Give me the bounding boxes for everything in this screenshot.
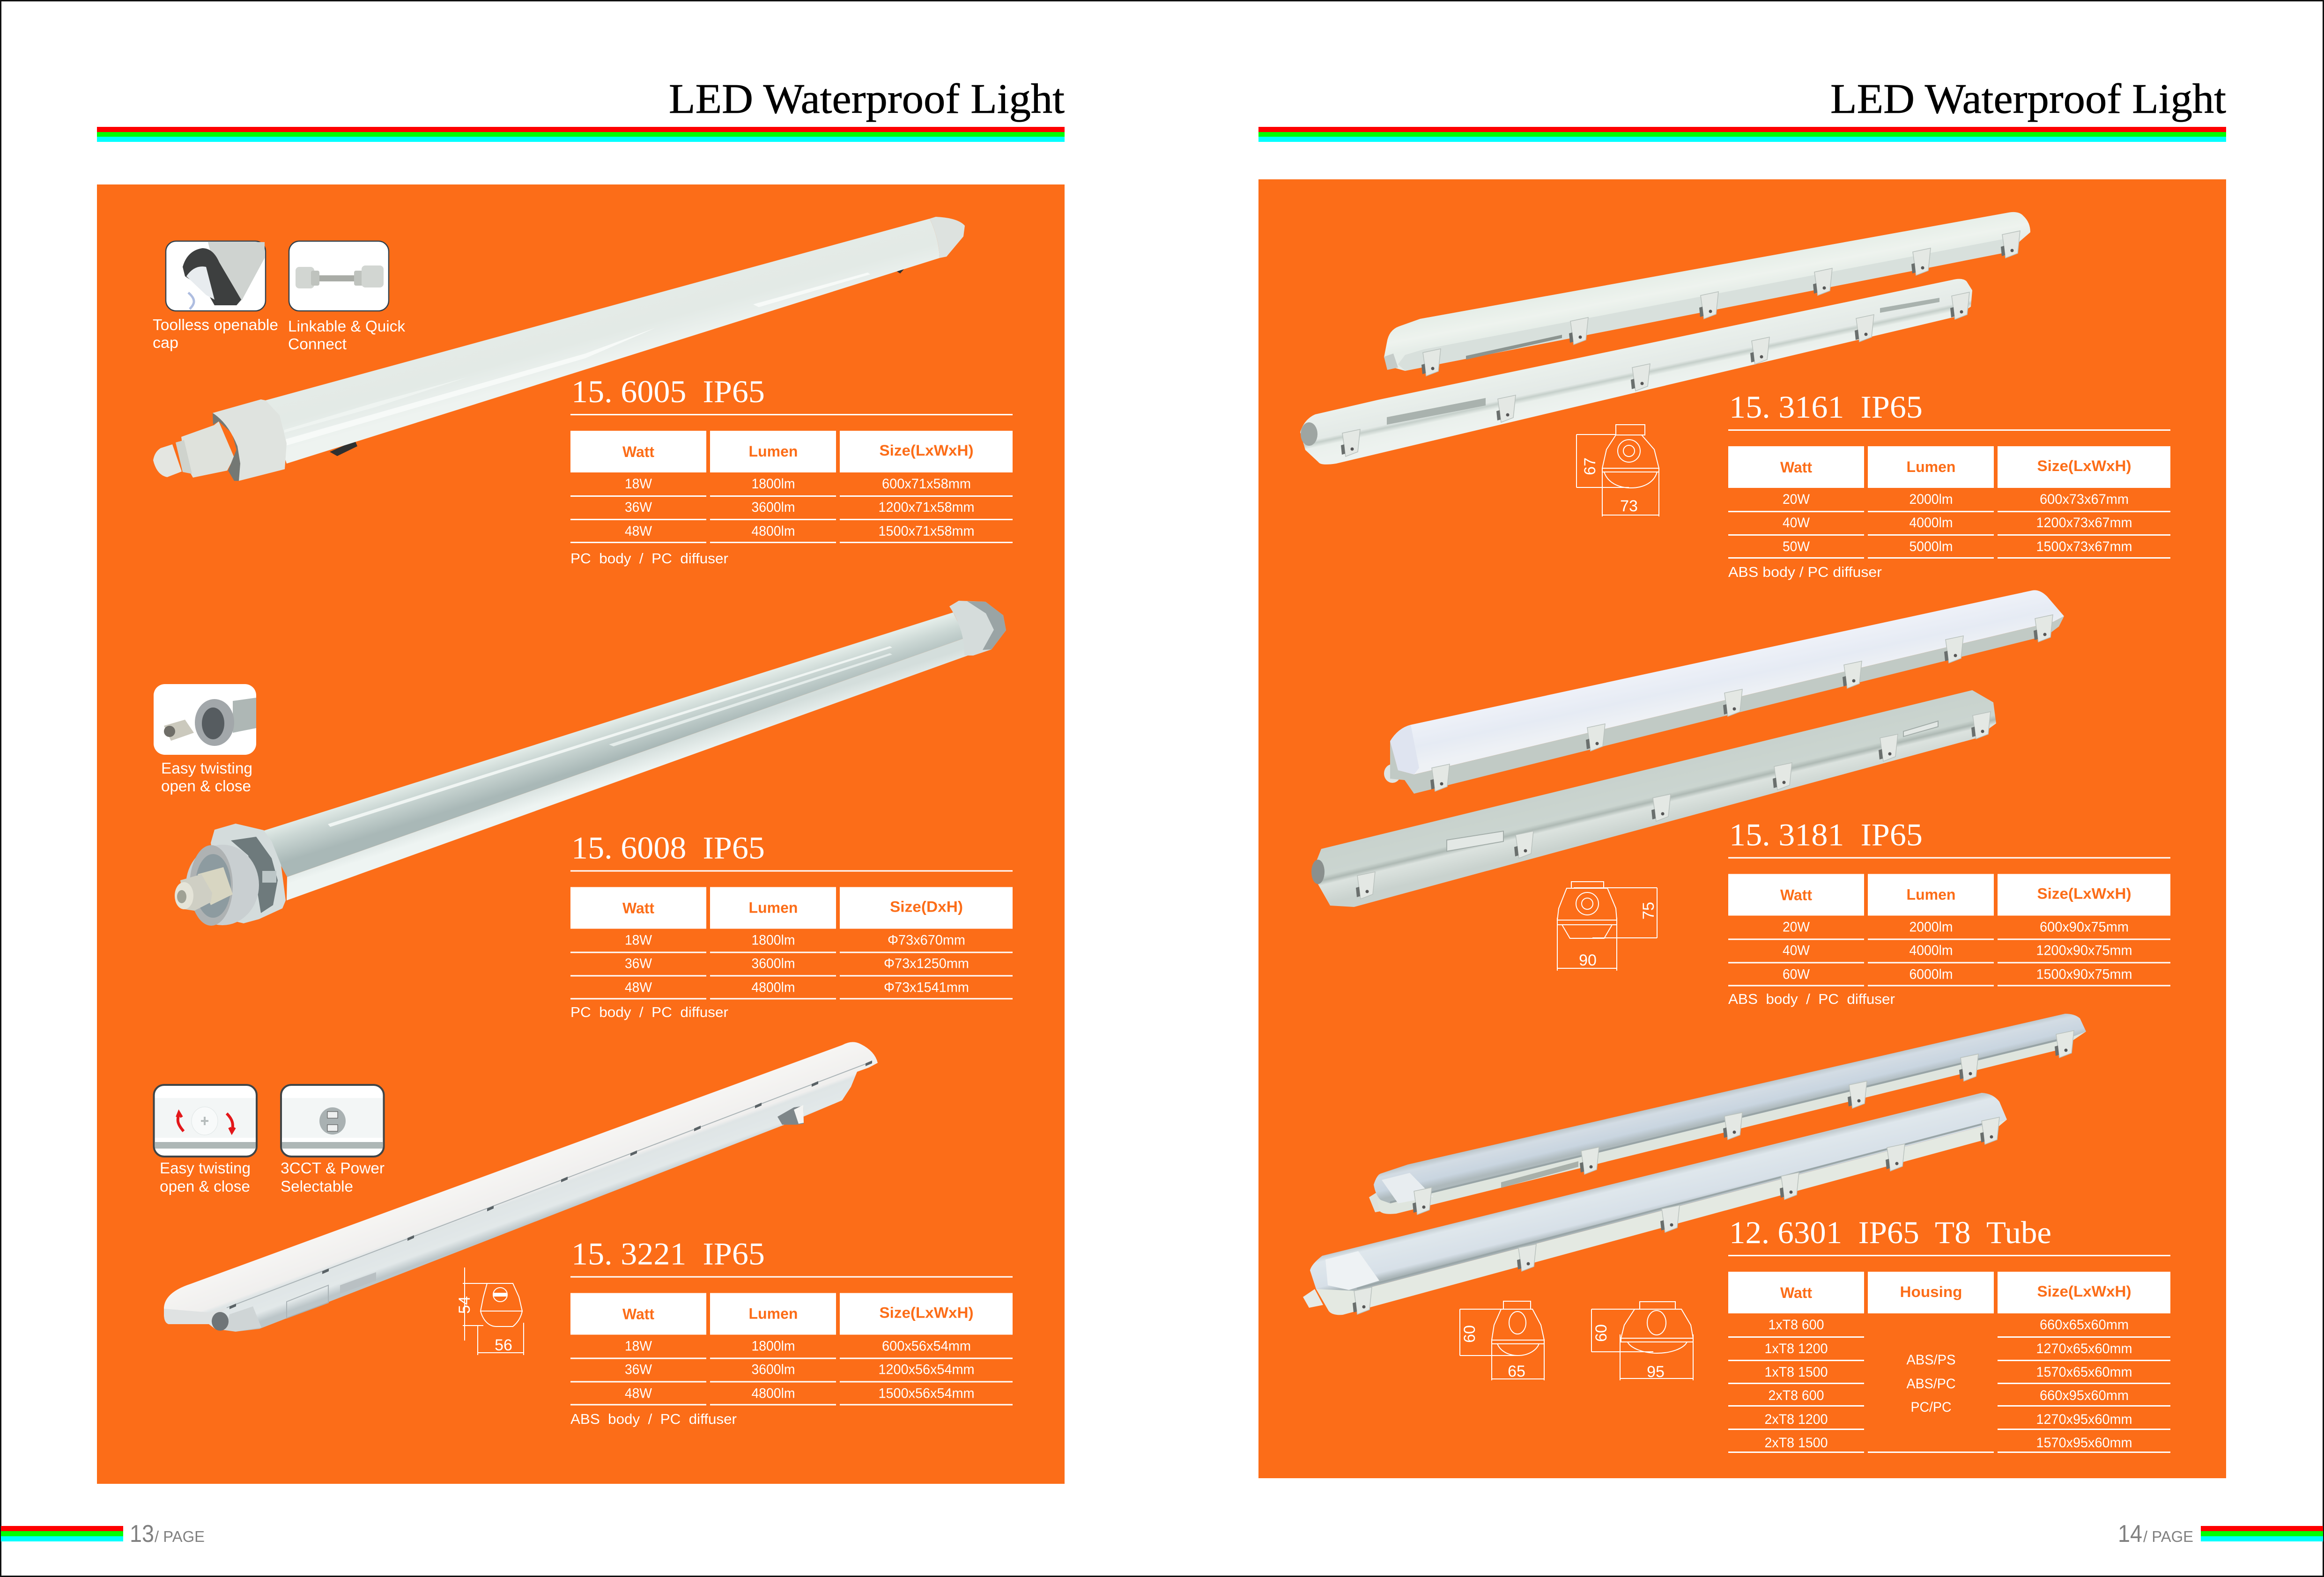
spec table: 1200x90x75mm <box>2036 943 2132 958</box>
spec table: 1270x95x60mm <box>2036 1412 2132 1427</box>
spec table: 40W <box>1783 515 1810 531</box>
caption: 3CCT & Power <box>281 1159 385 1177</box>
panel: orange product panel <box>1258 179 2226 1478</box>
spec table: 1200x56x54mm <box>879 1362 974 1378</box>
spec table: 48W <box>625 1386 652 1401</box>
spec table <box>570 1293 1013 1406</box>
dimension drawing: 75 x 90 <box>1557 882 1658 971</box>
spec table: 1800lm <box>751 1338 795 1354</box>
spec table: Φ73x1541mm <box>884 980 969 995</box>
spec table: 1800lm <box>751 933 795 948</box>
material note: ABS body / PC diffuser <box>1728 991 1895 1007</box>
caption: Easy twisting <box>161 759 252 777</box>
caption: Easy twisting <box>160 1159 251 1177</box>
model title: 15. 3181 IP65 <box>1729 817 1923 852</box>
caption: Linkable & Quick <box>288 317 405 335</box>
heading: LED Waterproof Light: LED Waterproof Light <box>669 76 1065 122</box>
spec table: 3600lm <box>751 500 795 515</box>
spec table: Size(LxWxH) <box>2037 885 2131 902</box>
page 14 <box>1258 76 2323 1548</box>
spec table <box>1728 1272 2170 1453</box>
spec table: Lumen <box>749 1305 798 1322</box>
spec table: 1xT8 1500 <box>1765 1364 1828 1380</box>
spec table <box>570 887 1013 999</box>
spec table: 18W <box>625 933 652 948</box>
latches <box>1341 231 2020 457</box>
spec table: Size(LxWxH) <box>2037 1283 2131 1300</box>
page number 13 <box>130 1520 205 1548</box>
spec table: Φ73x1250mm <box>884 956 969 971</box>
spec table: 2000lm <box>1909 492 1953 507</box>
inset: linkable and quick connect <box>288 241 405 353</box>
spec table: Watt <box>622 443 654 460</box>
spec table: Φ73x670mm <box>888 933 965 948</box>
spec table: 1570x65x60mm <box>2036 1364 2132 1380</box>
caption: open & close <box>160 1178 250 1195</box>
page number 14: 14 <box>2118 1520 2142 1548</box>
caption <box>160 1159 251 1195</box>
dimension drawing: 75 x 90: 90 <box>1579 951 1597 969</box>
spec table: ABS/PS <box>1906 1352 1956 1368</box>
spec table: 600x90x75mm <box>2040 920 2129 935</box>
caption <box>153 316 278 351</box>
dimension drawing: 75 x 90: 75 <box>1640 902 1658 920</box>
spec table: Lumen <box>749 443 798 460</box>
spec table: 48W <box>625 523 652 539</box>
spec table: 1200x73x67mm <box>2036 515 2132 531</box>
spec table: PC/PC <box>1911 1400 1951 1415</box>
model title: 15. 6008 IP65 <box>571 830 765 865</box>
spec table: 18W <box>625 1338 652 1354</box>
spec table: 4800lm <box>751 980 795 995</box>
product photo: 12.6301 T8 pair <box>1303 1014 2086 1315</box>
page number 13: 13 <box>130 1520 154 1548</box>
spec table: 36W <box>625 956 652 971</box>
spec table: 4000lm <box>1909 515 1953 531</box>
dimension drawing: 67 x 73 <box>1576 425 1659 516</box>
spec table: Size(LxWxH) <box>2037 457 2131 474</box>
page number 13: / PAGE <box>155 1528 205 1546</box>
spec table: Watt <box>1780 1284 1812 1301</box>
spec table: 48W <box>625 980 652 995</box>
spec table: 4800lm <box>751 1386 795 1401</box>
spec table: 36W <box>625 500 652 515</box>
spec table: 60W <box>1783 966 1810 982</box>
spec table <box>570 431 1013 543</box>
spec table: 660x95x60mm <box>2040 1388 2129 1403</box>
spec table: 600x56x54mm <box>882 1338 971 1354</box>
spec table: 1270x65x60mm <box>2036 1341 2132 1356</box>
product photo: 15.3161 pair <box>1300 212 2030 464</box>
spec block: 15.3181 <box>1728 817 2170 1007</box>
dimension drawing: 54 x 56 <box>456 1267 524 1355</box>
dimension drawing: 60 x 95: 60 <box>1592 1324 1610 1342</box>
material note: ABS body / PC diffuser <box>1728 564 1882 580</box>
inset: easy twisting arrows <box>154 1085 257 1195</box>
footer band: page 14 <box>2201 1526 2323 1541</box>
dimension drawing: 54 x 56: 56 <box>495 1336 512 1354</box>
spec table: Housing <box>1900 1283 1962 1300</box>
inset: 3CCT and power selectable <box>281 1085 385 1195</box>
spec table: 600x71x58mm <box>882 476 971 492</box>
header colour band <box>1258 127 2226 142</box>
spec table <box>1728 446 2170 559</box>
spec table: 20W <box>1783 492 1810 507</box>
inset: easy twisting open and close <box>154 684 256 795</box>
spec table: 2000lm <box>1909 920 1953 935</box>
panel: orange product panel <box>97 184 1065 1484</box>
latches <box>1353 1031 2074 1314</box>
spec table <box>1728 874 2170 986</box>
caption: open & close <box>161 777 251 795</box>
caption: Toolless openable <box>153 316 278 333</box>
spec table: Size(DxH) <box>890 898 963 915</box>
product photo: 15.6008 round tube light <box>175 601 1006 926</box>
spec table: 50W <box>1783 539 1810 554</box>
dimension drawing: 60 x 65: 65 <box>1508 1363 1525 1380</box>
page 13 <box>1 76 1065 1548</box>
spec table: 1200x71x58mm <box>879 500 974 515</box>
spec block: 15.6008 <box>570 830 1013 1020</box>
spec table: Watt <box>622 900 654 917</box>
spec table: 1800lm <box>751 476 795 492</box>
page number 14 <box>2118 1520 2193 1548</box>
spec table: Size(LxWxH) <box>880 1304 973 1321</box>
spec block: 15.3221 <box>570 1236 1013 1427</box>
footer band: page 13 <box>1 1526 123 1541</box>
spec table: 3600lm <box>751 956 795 971</box>
spec table: 6000lm <box>1909 966 1953 982</box>
spec table: 40W <box>1783 943 1810 958</box>
spec table: 1xT8 600 <box>1769 1317 1824 1333</box>
caption: Connect <box>288 335 347 353</box>
caption <box>288 317 405 353</box>
model title: 15. 3221 IP65 <box>571 1236 765 1272</box>
spec table: 2xT8 1500 <box>1765 1435 1828 1451</box>
spec table: 4800lm <box>751 523 795 539</box>
material note: PC body / PC diffuser <box>570 1004 728 1020</box>
spec table: Lumen <box>749 899 798 916</box>
spec table: 600x73x67mm <box>2040 492 2129 507</box>
spec block: 15.6005 <box>570 374 1013 567</box>
latches <box>1356 615 2053 899</box>
spec table: 2xT8 1200 <box>1765 1412 1828 1427</box>
dimension drawing: 54 x 56: 54 <box>456 1296 474 1314</box>
model title: 12. 6301 IP65 T8 Tube <box>1729 1215 2051 1250</box>
heading: LED Waterproof Light: LED Waterproof Light <box>1830 76 2226 122</box>
spec table: Size(LxWxH) <box>880 442 973 459</box>
page number 14: / PAGE <box>2143 1528 2193 1546</box>
dimension drawing: 60 x 65: 60 <box>1461 1325 1479 1343</box>
spec table: 1500x73x67mm <box>2036 539 2132 554</box>
caption: cap <box>153 334 178 351</box>
spec table: 36W <box>625 1362 652 1378</box>
model title: 15. 6005 IP65 <box>571 374 765 409</box>
caption: Selectable <box>281 1178 353 1195</box>
spec table: Watt <box>622 1305 654 1322</box>
spec table: Watt <box>1780 459 1812 476</box>
spec table: 1570x95x60mm <box>2036 1435 2132 1451</box>
caption <box>161 759 252 795</box>
spec table: 2xT8 600 <box>1769 1388 1824 1403</box>
spec table: 1xT8 1200 <box>1765 1341 1828 1356</box>
spec table: 1500x71x58mm <box>879 523 974 539</box>
spec table: Watt <box>1780 887 1812 904</box>
spec table: 18W <box>625 476 652 492</box>
spec block: 12.6301 <box>1728 1215 2170 1453</box>
caption <box>281 1159 385 1195</box>
material note: PC body / PC diffuser <box>570 550 728 567</box>
dimension drawing: 60 x 95 <box>1591 1302 1693 1381</box>
model title: 15. 3161 IP65 <box>1729 389 1923 425</box>
dimension drawing: 67 x 73: 73 <box>1620 497 1638 515</box>
spec table: 5000lm <box>1909 539 1953 554</box>
dimension drawing: 67 x 73: 67 <box>1581 457 1599 475</box>
spec table: 1500x56x54mm <box>879 1386 974 1401</box>
dimension drawing: 60 x 95: 95 <box>1647 1363 1665 1381</box>
spec table: Lumen <box>1907 886 1955 903</box>
spec table: 1500x90x75mm <box>2036 966 2132 982</box>
header colour band <box>97 127 1065 142</box>
inset: toolless openable cap <box>153 241 278 351</box>
spec table: 4000lm <box>1909 943 1953 958</box>
spec table: 3600lm <box>751 1362 795 1378</box>
spec table: Lumen <box>1907 458 1955 475</box>
spec table: 660x65x60mm <box>2040 1317 2129 1333</box>
spec table: ABS/PC <box>1906 1376 1956 1392</box>
spec table: 20W <box>1783 920 1810 935</box>
product photo: 15.3181 pair <box>1311 590 2064 907</box>
material note: ABS body / PC diffuser <box>570 1411 737 1427</box>
product photo: 15.6005 tube light <box>153 217 965 481</box>
dimension drawing: 60 x 65 <box>1460 1301 1544 1380</box>
spec block: 15.3161 <box>1728 389 2170 580</box>
product photo: 15.3221 slim batten <box>164 1042 878 1332</box>
